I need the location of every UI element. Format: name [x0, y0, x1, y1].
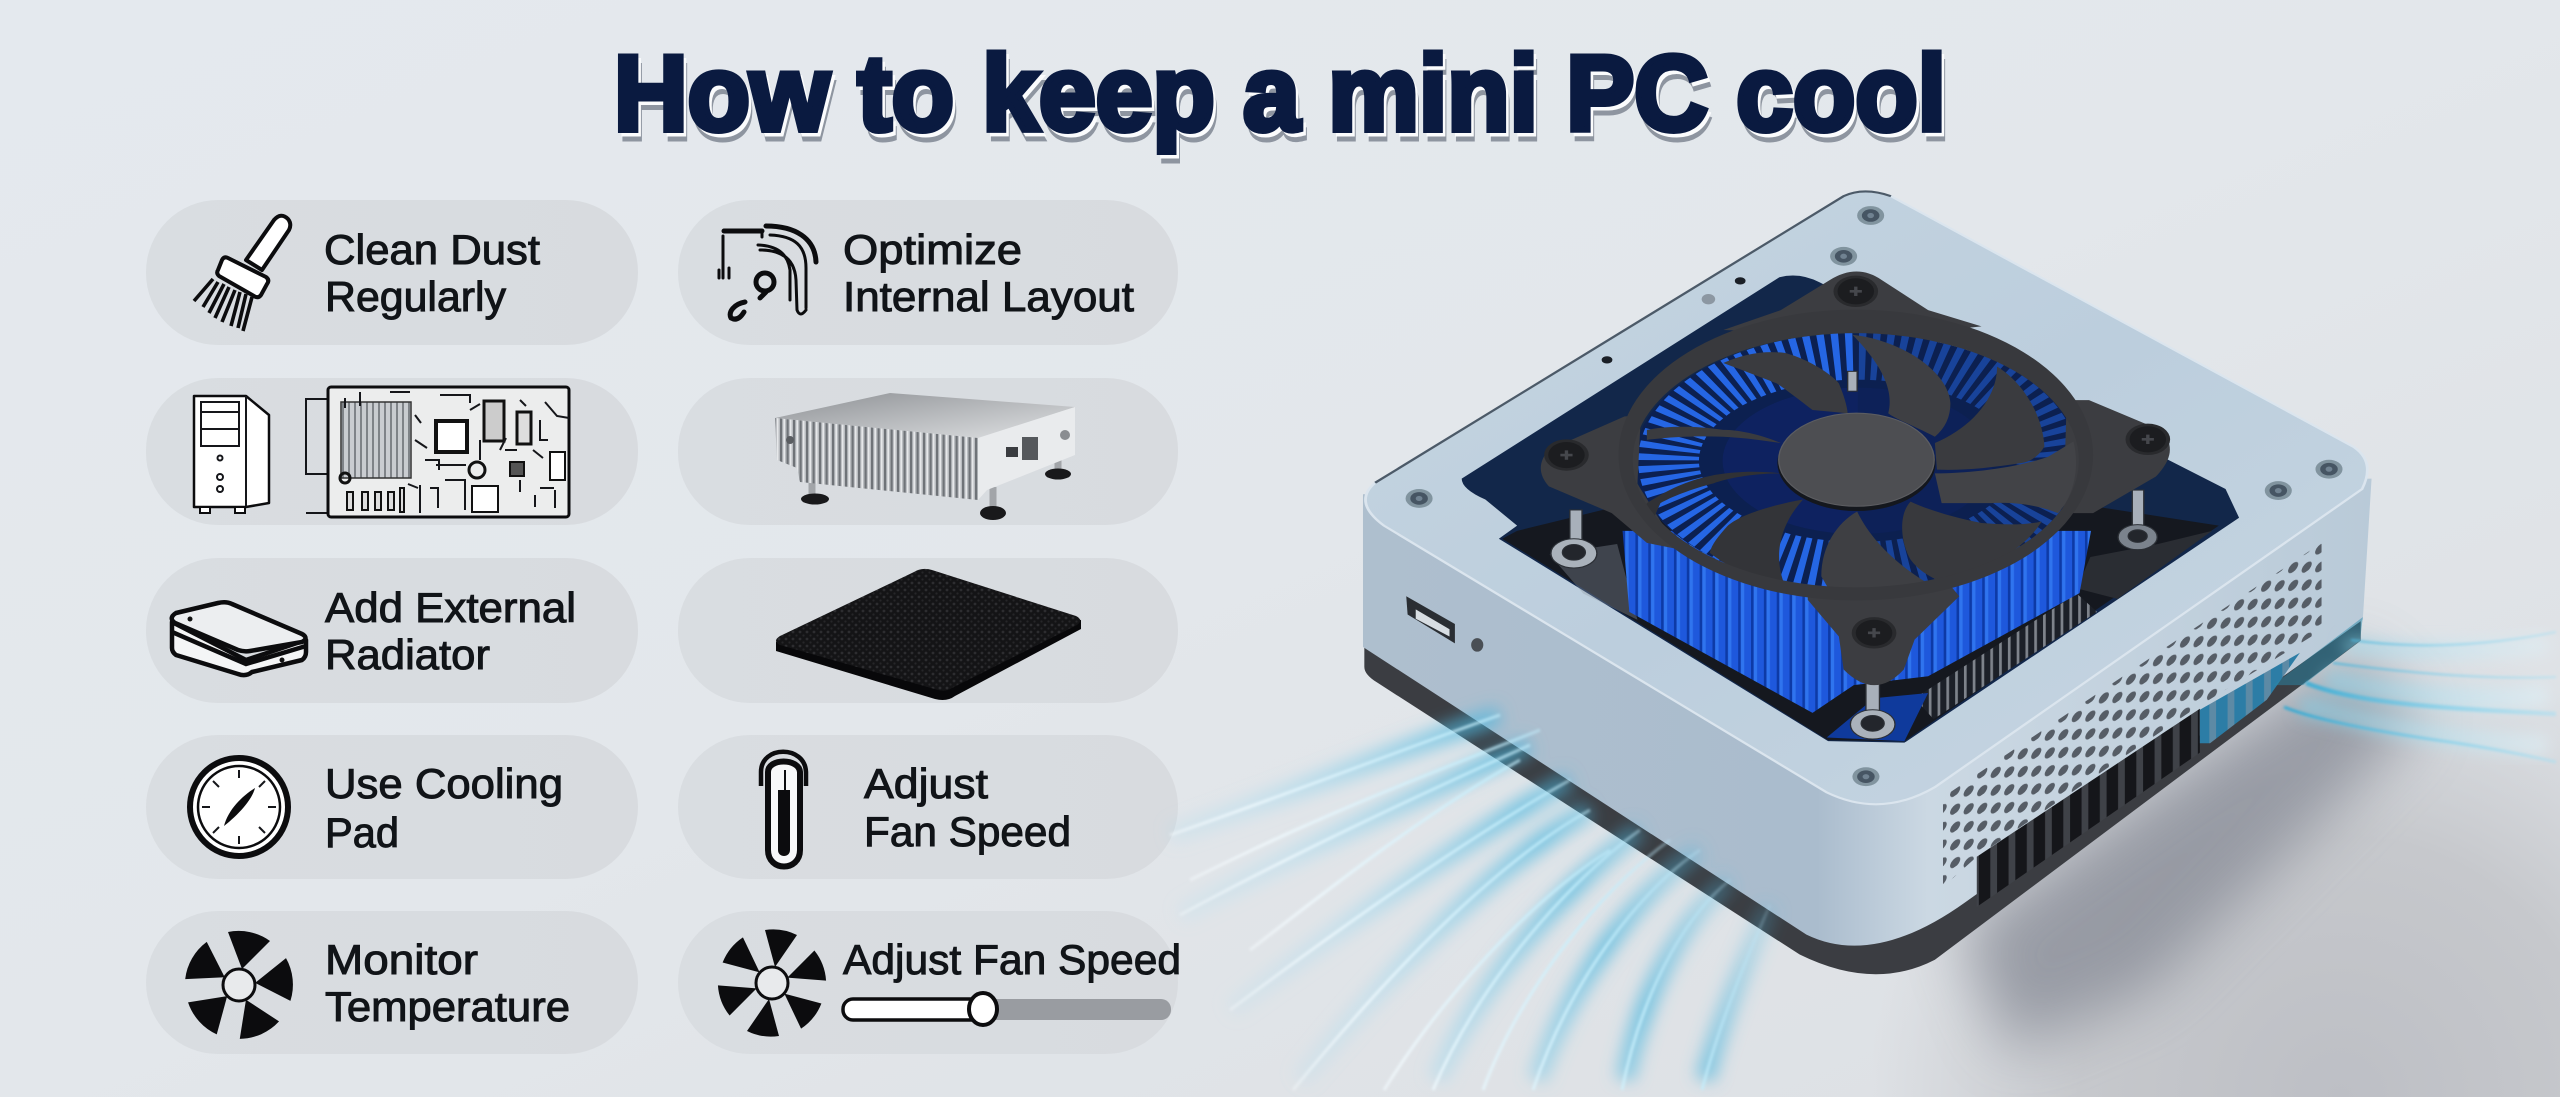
panel: clean dust	[146, 200, 638, 345]
label: adjust fan speed: Adjust	[864, 760, 988, 807]
label: monitor temperature: Temperature	[325, 983, 570, 1030]
standoffs	[1551, 371, 2157, 739]
fan screws	[1544, 276, 2170, 649]
label: clean dust: Regularly	[325, 273, 506, 320]
icon: motherboard	[306, 387, 569, 517]
panel: tower and motherboard	[146, 378, 638, 525]
fan hub	[1777, 413, 1936, 511]
top face	[1366, 191, 2367, 804]
fan blades	[1645, 335, 2076, 592]
label: add external radiator: Radiator	[325, 631, 490, 678]
body walls	[1363, 479, 2372, 946]
mini PC illustration	[1363, 191, 2372, 974]
label: clean dust	[324, 226, 540, 320]
fan frame corners	[1541, 271, 2170, 685]
panel: adjust fan speed thermometer	[678, 735, 1178, 879]
label: use cooling pad: Pad	[325, 809, 399, 856]
panel: monitor temperature	[146, 911, 638, 1054]
label: optimize internal layout: Optimize	[843, 226, 1022, 273]
mounting holes	[1406, 206, 2343, 786]
icon: aluminium finned case on feet	[775, 393, 1075, 520]
icon: fan right	[713, 929, 831, 1037]
icon: thermometer	[761, 752, 806, 866]
icon: brush	[194, 216, 290, 331]
label: use cooling pad	[325, 760, 563, 856]
icon: external radiator box	[172, 602, 306, 675]
ground shadow	[1860, 620, 2560, 1097]
fan ring	[1619, 310, 2093, 600]
opening	[1462, 275, 2239, 743]
panel: heatsink stand	[678, 378, 1178, 525]
black exhaust fins	[1977, 709, 2200, 907]
label: monitor temperature: Monitor	[325, 936, 478, 983]
USB port	[1406, 596, 1483, 652]
panel: add external radiator	[146, 558, 638, 703]
base	[1364, 615, 2361, 974]
title: How to keep a mini PC cool	[618, 42, 1950, 162]
label: optimize internal layout	[843, 226, 1134, 320]
icon: gauge	[190, 758, 288, 856]
slider	[842, 993, 1171, 1025]
airflow streams right	[2284, 632, 2556, 762]
blue heatsink	[1623, 332, 2091, 713]
interior board	[1502, 505, 2219, 741]
label: add external radiator: Add External	[325, 584, 576, 631]
label: add external radiator	[325, 584, 576, 678]
title: How to keep a mini PC cool	[614, 33, 1946, 153]
label: adjust fan speed: Fan Speed	[864, 808, 1071, 855]
teal vent glow	[2200, 653, 2300, 743]
label: adjust fan speed slider: Adjust Fan Speed	[843, 936, 1181, 983]
label: adjust fan speed	[864, 760, 1071, 855]
icon: textured pad	[776, 569, 1081, 700]
icon: airflow layout	[719, 226, 816, 319]
panel: black cooling pad	[678, 558, 1178, 703]
teal base glow	[2273, 617, 2363, 685]
panel: use cooling pad	[146, 735, 638, 879]
icon: tower case	[194, 396, 269, 513]
panel: adjust fan speed slider	[678, 911, 1181, 1054]
vent perforation	[1943, 543, 2322, 887]
label: optimize internal layout: Internal Layout	[843, 273, 1134, 320]
panel: optimize internal layout	[678, 200, 1178, 345]
title: How to keep a mini PC cool	[617, 37, 1949, 157]
airflow streams left	[1170, 715, 1770, 1090]
label: use cooling pad: Use Cooling	[325, 760, 563, 807]
label: clean dust: Clean Dust	[324, 226, 540, 273]
icon: fan left	[182, 931, 300, 1047]
label: monitor temperature	[325, 936, 570, 1030]
